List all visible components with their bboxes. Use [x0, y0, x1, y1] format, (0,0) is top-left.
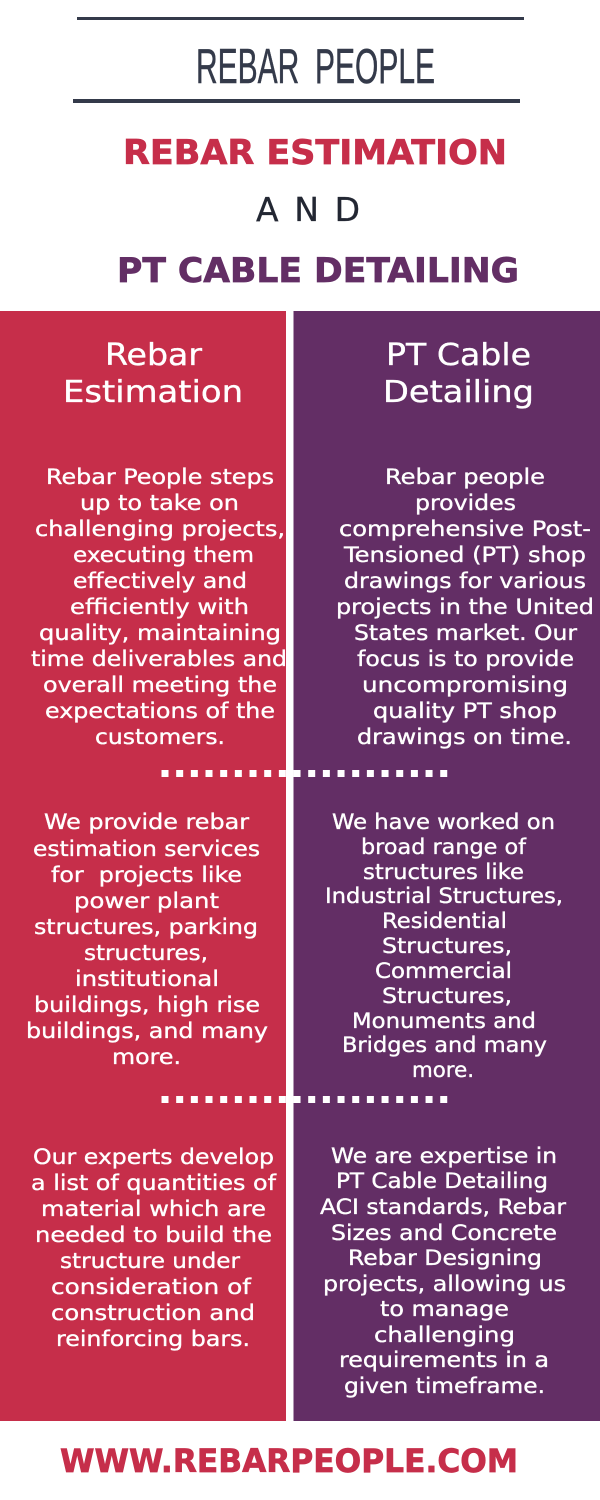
text block: rebar experts: structure under — [60, 1249, 240, 1273]
text block: rebar services: power plant — [74, 889, 219, 913]
text block: rebar intro: executing them — [73, 543, 254, 567]
text block: pt intro: drawings on time. — [357, 725, 572, 749]
column heading: rebar estimation: Rebar — [105, 338, 203, 373]
text block: pt intro: projects in the United — [336, 595, 594, 619]
text block: pt intro: Tensioned (PT) shop — [343, 543, 586, 567]
text block: rebar services — [26, 810, 268, 1069]
text block: pt structures: Commercial — [375, 959, 512, 983]
text block: pt structures — [325, 810, 563, 1082]
column heading: pt cable detailing: PT Cable — [386, 338, 531, 373]
heading: pt cable detailing: PT CABLE DETAILING — [117, 251, 519, 291]
dotted divider 1 — [162, 770, 448, 777]
text block: pt structures: more. — [412, 1058, 474, 1082]
text block: rebar intro: challenging projects, — [35, 517, 285, 541]
header rule top — [77, 17, 524, 20]
text block: pt intro: States market. Our — [354, 621, 577, 645]
text block: pt structures: We have worked on — [332, 810, 555, 834]
text block: rebar experts — [31, 1145, 277, 1351]
text block: rebar experts: Our experts develop — [33, 1145, 274, 1169]
footer url: WWW.REBARPEOPLE.COM — [60, 1442, 518, 1480]
text block: rebar intro: up to take on — [80, 491, 239, 515]
text block: rebar intro: customers. — [95, 725, 225, 749]
panel: pt cable detailing — [294, 311, 600, 1421]
text block: pt expertise — [320, 1144, 566, 1398]
text block: pt intro: drawings for various — [344, 569, 586, 593]
text block: pt intro — [336, 465, 594, 749]
text block: pt expertise: We are expertise in — [331, 1144, 557, 1168]
text block: pt structures: Structures, — [382, 934, 512, 958]
text block: pt expertise: to manage — [380, 1297, 509, 1321]
text block: pt structures: Monuments and — [352, 1009, 536, 1033]
text block: rebar intro: Rebar People steps — [46, 465, 274, 489]
text block: rebar experts: needed to build the — [35, 1223, 272, 1247]
text block: rebar services: for projects like — [51, 863, 242, 887]
text block: rebar services: more. — [112, 1045, 181, 1069]
text block: rebar experts: consideration of — [51, 1275, 252, 1299]
text block: rebar intro: overall meeting the — [43, 673, 277, 697]
text block: rebar intro: efficiently with — [70, 595, 249, 619]
text block: rebar services: institutional — [75, 967, 219, 991]
text block: pt intro: uncompromising — [362, 673, 568, 697]
text block: pt expertise: Rebar Designing — [348, 1246, 542, 1270]
heading: rebar estimation: REBAR ESTIMATION — [123, 133, 507, 173]
dotted divider 2 — [162, 1096, 448, 1103]
text block: rebar intro: time deliverables and — [31, 647, 287, 671]
column heading: rebar estimation: Estimation — [63, 375, 243, 410]
text block: rebar intro: expectations of the — [45, 699, 275, 723]
text block: rebar experts: material which are — [41, 1197, 266, 1221]
heading: and: A N D — [256, 190, 360, 229]
text block: pt structures: Structures, — [382, 984, 512, 1008]
text block: rebar intro: effectively and — [73, 569, 247, 593]
text block: rebar experts: a list of quantities of — [31, 1171, 277, 1195]
text block: rebar services: buildings, and many — [26, 1019, 268, 1043]
text block: pt expertise: Sizes and Concrete — [331, 1221, 557, 1245]
text block: rebar services: We provide rebar — [44, 810, 249, 834]
text block: pt expertise: challenging — [374, 1323, 515, 1347]
text block: pt structures: structures like — [363, 860, 524, 884]
header rule bottom — [73, 99, 520, 103]
text block: pt intro: quality PT shop — [373, 699, 557, 723]
text block: rebar intro: quality, maintaining — [39, 621, 281, 645]
text block: pt intro: focus is to provide — [357, 647, 574, 671]
text block: rebar services: structures, — [84, 941, 208, 965]
title: REBAR PEOPLE — [196, 40, 435, 94]
text block: pt expertise: ACI standards, Rebar — [320, 1195, 566, 1219]
panel: rebar estimation — [0, 311, 287, 1421]
text block: pt expertise: given timeframe. — [344, 1374, 545, 1398]
text block: rebar services: estimation services — [33, 837, 260, 861]
column heading: pt cable detailing — [383, 338, 534, 410]
text block: rebar intro — [31, 465, 287, 749]
text block: rebar experts: construction and — [51, 1301, 255, 1325]
text block: rebar experts: reinforcing bars. — [56, 1327, 250, 1351]
text block: rebar services: structures, parking — [34, 915, 258, 939]
text block: pt intro: comprehensive Post- — [339, 517, 591, 541]
text block: pt structures: Bridges and many — [342, 1033, 547, 1057]
column heading: rebar estimation — [63, 338, 243, 410]
text block: pt intro: provides — [415, 491, 516, 515]
column heading: pt cable detailing: Detailing — [383, 375, 534, 410]
text block: pt expertise: projects, allowing us — [323, 1272, 566, 1296]
text block: pt expertise: PT Cable Detailing — [336, 1169, 548, 1193]
text block: pt expertise: requirements in a — [339, 1348, 549, 1372]
text block: pt intro: Rebar people — [385, 465, 545, 489]
text block: rebar services: buildings, high rise — [34, 993, 260, 1017]
text block: pt structures: Industrial Structures, — [325, 884, 563, 908]
text block: pt structures: Residential — [382, 909, 507, 933]
text block: pt structures: broad range of — [361, 835, 527, 859]
